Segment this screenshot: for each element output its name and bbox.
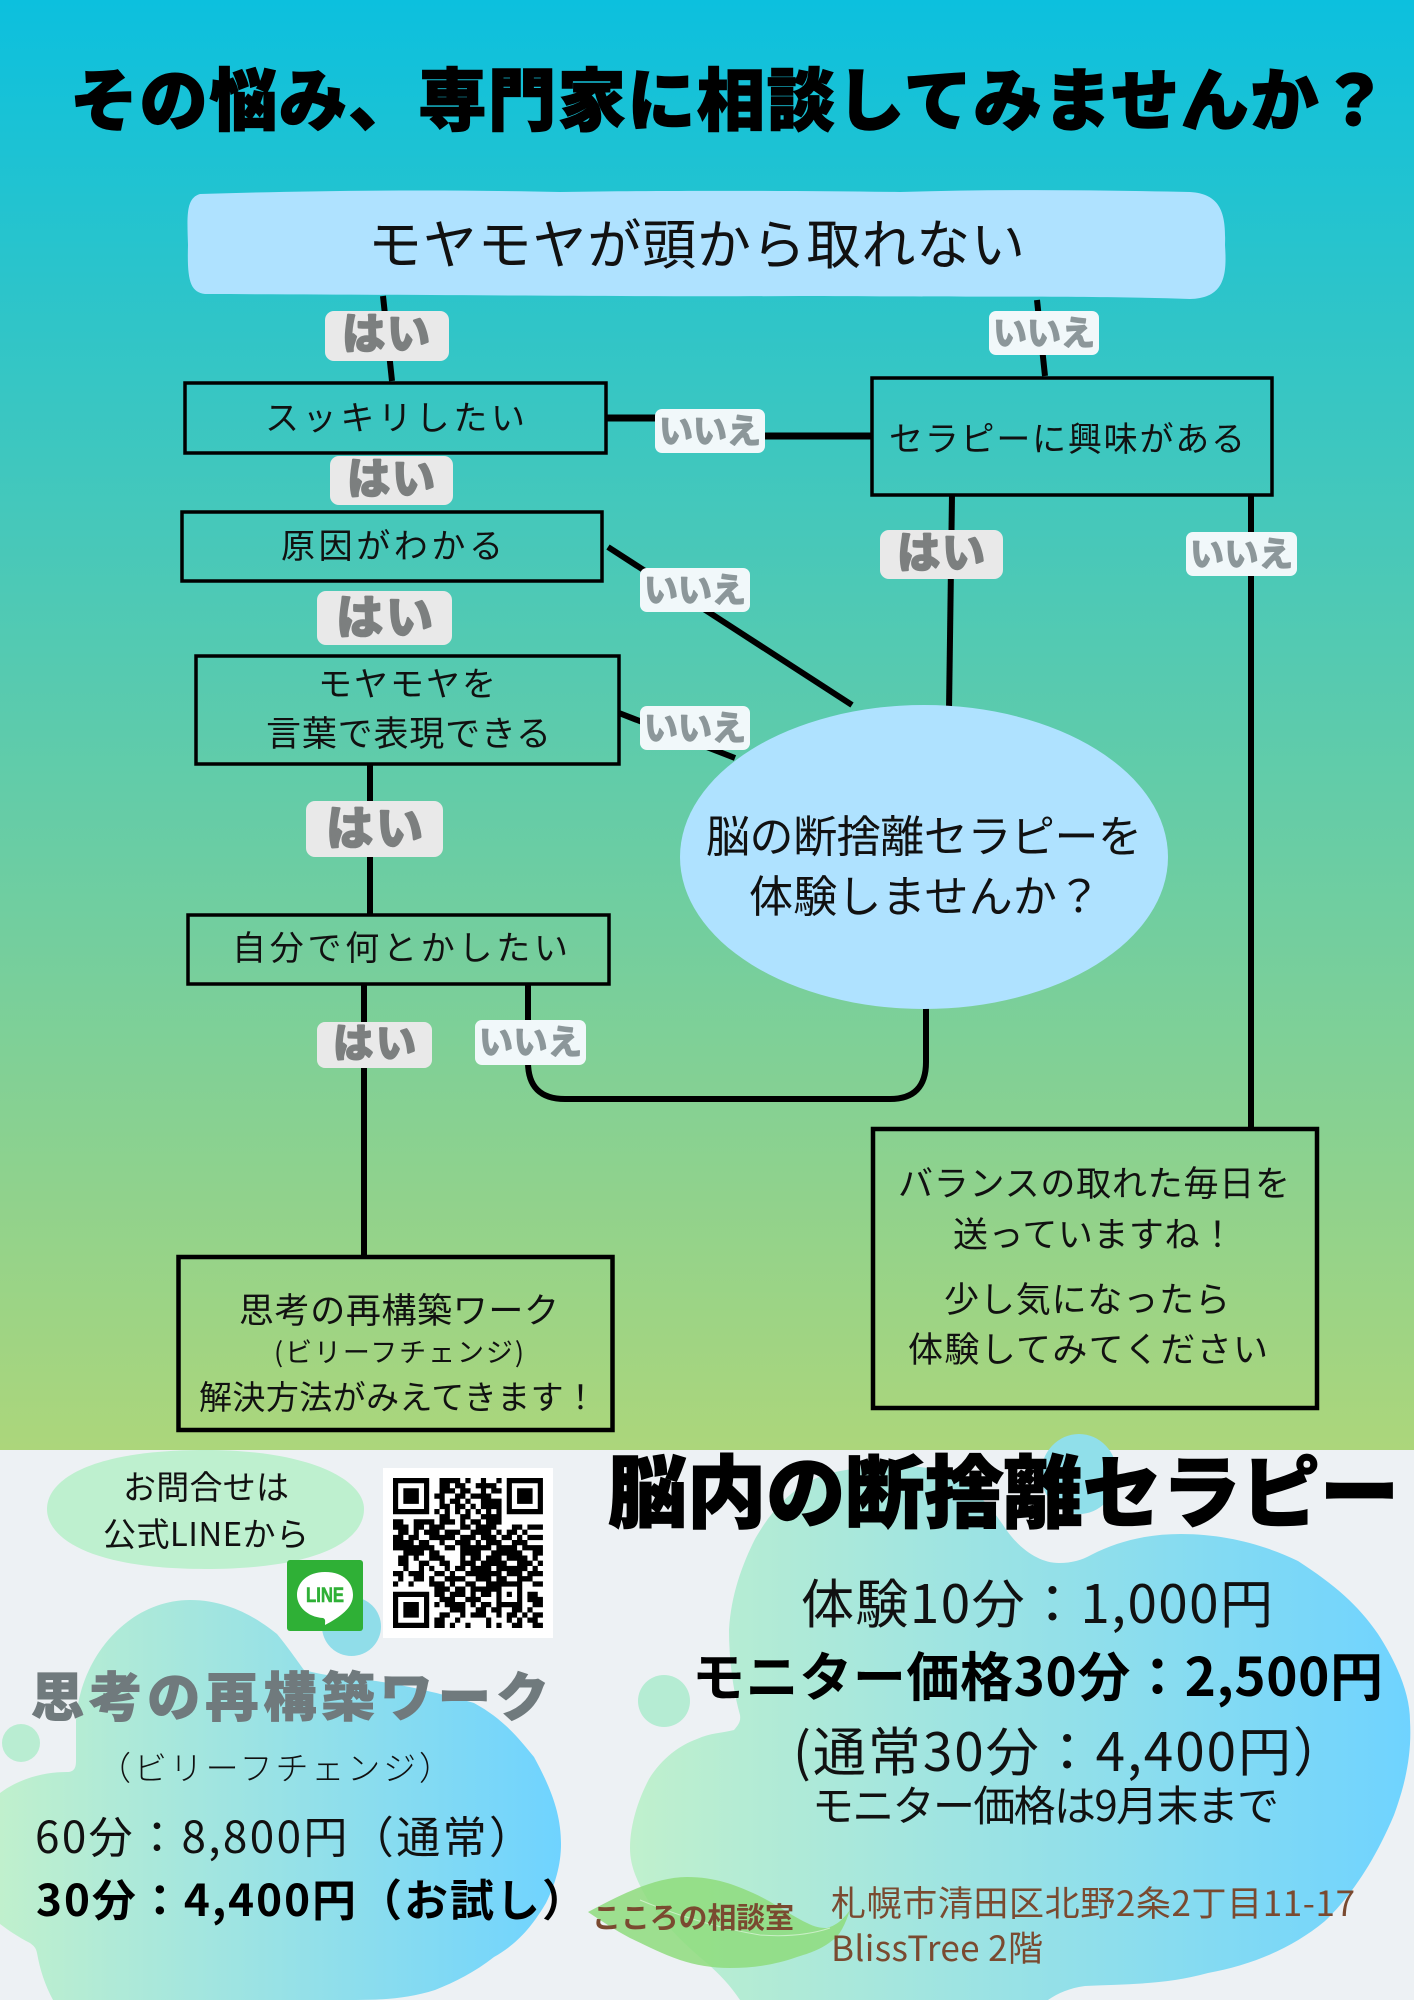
- contact bubble: [47, 1450, 364, 1569]
- result box: balanced days: 体験してみてください: [908, 1322, 1268, 1373]
- heading: belief change work: 思考の再構築ワーク: [31, 1656, 549, 1732]
- start box: moya moya: [187, 190, 1226, 299]
- result box: balanced days: 少し気になったら: [944, 1272, 1230, 1323]
- label: yes 4: はい: [897, 519, 985, 581]
- flowchart background panel: [0, 0, 1414, 1450]
- contact bubble: お問合せは: [123, 1461, 289, 1509]
- box: cause known: [182, 512, 602, 581]
- label: yes 6: はい: [333, 1011, 416, 1069]
- label: no 1: いいえ: [993, 306, 1095, 355]
- price: monitor: モニター価格30分：2,500円: [692, 1636, 1383, 1712]
- contact bubble: 公式LINEから: [103, 1508, 309, 1556]
- result box: belief change: 解決方法がみえてきます！: [199, 1371, 597, 1419]
- dot: top blue circle: [1041, 1434, 1117, 1514]
- pricing background panel: [0, 1450, 1414, 2000]
- start box: moya moya: モヤモヤが頭から取れない: [368, 201, 1025, 280]
- dot: blue circle: [322, 1597, 381, 1656]
- box: cause known: 原因がわかる: [281, 519, 503, 568]
- label: yes 2: はい: [347, 445, 435, 507]
- address: 札幌市清田区北野2条2丁目11-17: [831, 1876, 1355, 1927]
- box: do it yourself: [188, 915, 609, 984]
- result box: balanced days: バランスの取れた毎日を: [898, 1156, 1290, 1207]
- ellipse: trial therapy: 脳の断捨離セラピーを: [706, 801, 1142, 865]
- result box: belief change: 思考の再構築ワーク: [239, 1283, 559, 1334]
- QR code: [383, 1468, 553, 1638]
- label: no 3: いいえ: [644, 563, 746, 612]
- connector lines: [364, 296, 1251, 1256]
- box: can express: モヤモヤを: [318, 657, 496, 706]
- label: yes 5: はい: [326, 790, 423, 859]
- box: sukkiri: スッキリしたい: [265, 391, 525, 440]
- label: no 4: いいえ: [644, 701, 746, 750]
- price: 30 minutes: 30分：4,400円（お試し）: [36, 1865, 586, 1929]
- label: yes 1: はい: [342, 300, 430, 362]
- label: no 6: いいえ: [479, 1015, 582, 1064]
- ellipse: trial therapy: [680, 705, 1168, 1009]
- icon: LINE: LINE: [306, 1584, 344, 1607]
- box: sukkiri: [185, 383, 606, 453]
- result box: balanced days: 送っていますね！: [953, 1207, 1235, 1258]
- box: therapy interest: セラピーに興味がある: [889, 412, 1245, 461]
- ellipse: trial therapy: 体験しませんか？: [749, 861, 1101, 925]
- icon: LINE: [287, 1560, 363, 1631]
- box: do it yourself: 自分で何とかしたい: [232, 921, 568, 970]
- result box: belief change: (ビリーフチェンジ): [274, 1331, 524, 1370]
- address: BlissTree 2階: [831, 1921, 1043, 1972]
- result box: belief change: [178, 1257, 612, 1430]
- heading: brain decluttering therapy: 脳内の断捨離セラピー: [608, 1429, 1399, 1544]
- note: monitor deadline: モニター価格は9月末まで: [812, 1773, 1279, 1834]
- blob: lower right: [630, 1465, 1410, 2000]
- leaf logo: [588, 1877, 850, 1968]
- price: regular: (通常30分：4,400円）: [793, 1711, 1346, 1787]
- address: [831, 1876, 1355, 1972]
- subheading: belief change: （ビリーフチェンジ）: [98, 1742, 452, 1790]
- box: therapy interest: [872, 378, 1272, 495]
- label: no 2: いいえ: [659, 404, 761, 453]
- box: can express: 言葉で表現できる: [266, 706, 551, 757]
- blob: lower left: [0, 1600, 561, 2000]
- label: yes 3: はい: [336, 579, 433, 648]
- box: can express: [196, 656, 619, 764]
- title: その悩み、専門家に相談してみませんか？: [70, 46, 1388, 145]
- leaf logo: こころの相談室: [592, 1895, 794, 1937]
- result box: balanced days: [873, 1129, 1317, 1408]
- price: 60 minutes: 60分：8,800円（通常）: [35, 1802, 533, 1866]
- dot: green ellipse: [638, 1675, 690, 1727]
- label: no 5: いいえ: [1190, 527, 1293, 576]
- dot: green circle: [2, 1724, 40, 1762]
- price: trial: 体験10分：1,000円: [801, 1563, 1273, 1639]
